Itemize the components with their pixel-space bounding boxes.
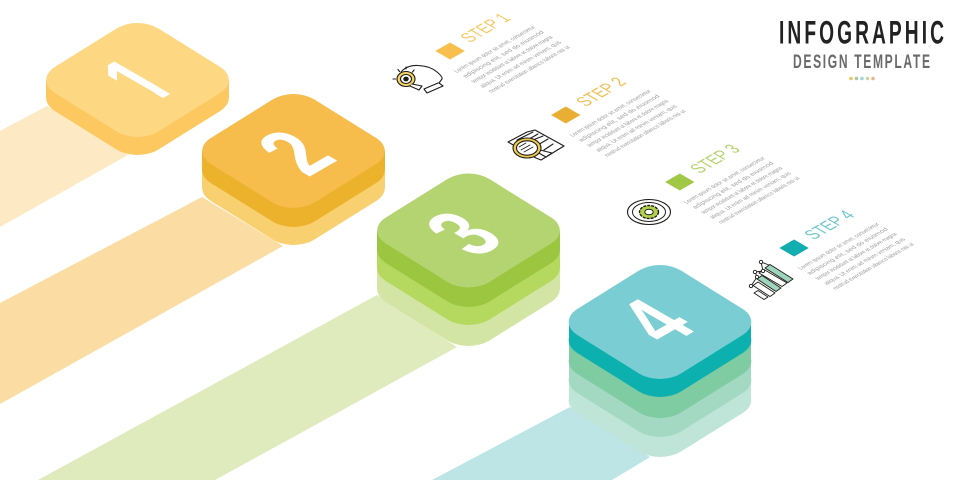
step 4 body: Lorem ipsum dolor sit amet, consectetur [797, 222, 882, 271]
step 2 body: tempor incididunt ut labore et dolore magna [586, 99, 671, 148]
block 4 [557, 257, 763, 465]
step 2 body: aliqua. Ut enim ad minim veniam, quis [594, 104, 680, 153]
block 3 [365, 166, 572, 354]
step 4 text block [768, 205, 917, 291]
step 2 body: Lorem ipsum dolor sit amet, consectetur [568, 89, 654, 138]
step 4 body: tempor incididunt ut labore et dolore magna [814, 232, 899, 281]
step 1 body [453, 25, 573, 94]
step 3 body: aliqua. Ut enim ad minim veniam, quis [708, 171, 794, 220]
step 1 text block [424, 8, 573, 94]
icon 3: gear with circular arrows [628, 200, 670, 224]
step 3 marker [665, 174, 694, 190]
step 2 text block [539, 72, 688, 158]
block 2 [190, 86, 397, 253]
step 3 body: nostrud exercitation ullamco laboris nisi ut [717, 176, 802, 225]
icon 2: document with magnifier [508, 130, 564, 160]
step 1 body: aliqua. Ut enim ad minim veniam, quis [479, 40, 564, 89]
step 3 body [682, 156, 802, 225]
icon 4: bar chart with line [749, 260, 793, 300]
step 2 body: adipiscing elit, sed do eiusmod [577, 94, 662, 143]
step 3 body: adipiscing elit, sed do eiusmod [691, 161, 776, 210]
step 3 body: tempor incididunt ut labore et dolore magna [700, 166, 785, 215]
step 2 heading: STEP 2 [572, 75, 632, 110]
step 1 marker [435, 42, 465, 60]
title line 2: DESIGN TEMPLATE [793, 51, 930, 73]
stripe 2: peach path [0, 197, 283, 404]
title [779, 14, 944, 80]
step 3 body: Lorem ipsum dolor sit amet, consectetur [682, 156, 768, 205]
number 2: 2 [235, 118, 357, 188]
step 3 heading: STEP 3 [686, 142, 746, 177]
step 4 body: nostrud exercitation ullamco laboris nisi ut [831, 242, 916, 291]
step 4 body [797, 222, 917, 291]
step 1 heading: STEP 1 [456, 11, 516, 46]
number 4: 4 [595, 287, 717, 357]
step 4 heading: STEP 4 [800, 208, 860, 243]
step 1 body: tempor incididunt ut labore et dolore magna [470, 35, 555, 84]
title line 1: INFOGRAPHIC [779, 14, 944, 51]
step 4 body: aliqua. Ut enim ad minim veniam, quis [823, 237, 908, 286]
block 1 [46, 23, 229, 155]
step 1 body: nostrud exercitation ullamco laboris nisi ut [487, 45, 572, 94]
step 2 body [568, 89, 688, 158]
number 3: 3 [403, 199, 525, 269]
step 4 marker [779, 240, 809, 256]
stripe 1: light yellow path [0, 106, 128, 227]
step 3 text block [653, 139, 802, 225]
step 2 marker [551, 106, 580, 124]
icon 1: head with light bulb [393, 65, 443, 93]
step 1 body: Lorem ipsum dolor sit amet, consectetur [453, 25, 538, 74]
stripe 3: light green path [38, 295, 457, 480]
number 1: 1 [78, 46, 197, 115]
title dots [849, 77, 875, 80]
step 4 body: adipiscing elit, sed do eiusmod [805, 227, 890, 276]
step 1 body: adipiscing elit, sed do eiusmod [461, 30, 546, 79]
stripe 4: light teal path [432, 407, 650, 480]
step 2 body: nostrud exercitation ullamco laboris nisi ut [603, 109, 688, 158]
